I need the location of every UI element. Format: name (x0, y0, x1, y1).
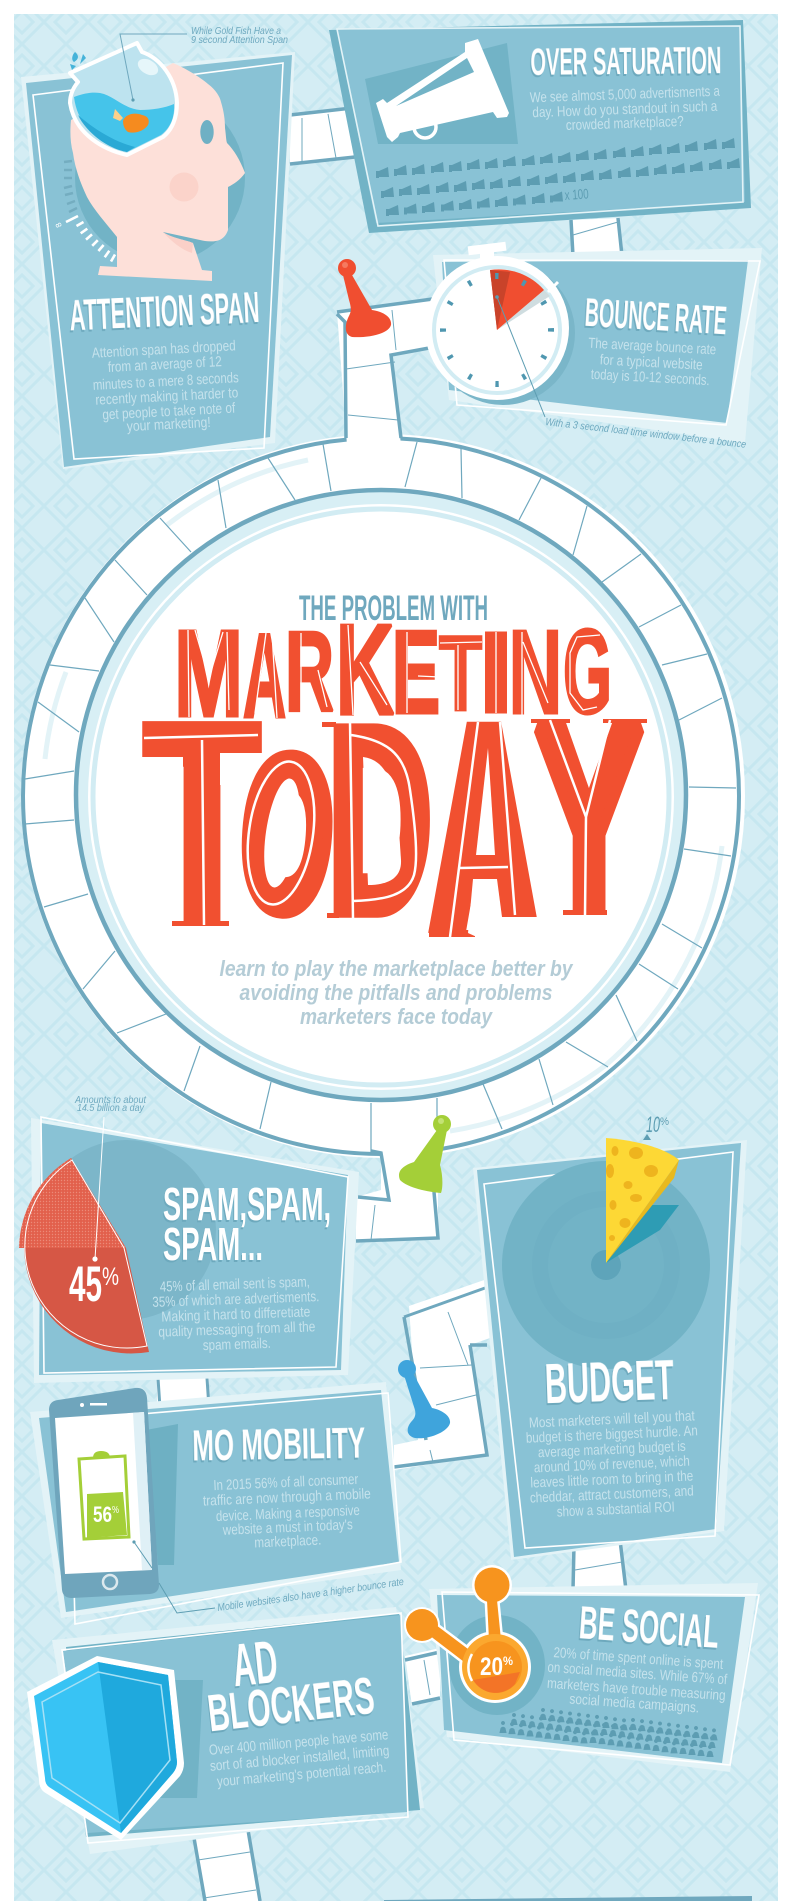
heading: ad blockers: AD (229, 1628, 281, 1699)
board path: between attention span and over saturation (290, 108, 355, 164)
text: budget body: show a substantial ROI (557, 1499, 675, 1521)
tick gauge (54, 161, 115, 262)
text: budget body: around 10% of revenue, which (534, 1454, 690, 1476)
panel: bounce rate (433, 248, 762, 451)
text: budget body (526, 1408, 698, 1521)
heading: marketing: G (563, 605, 612, 739)
text: bounce rate body (588, 336, 717, 389)
icon: megaphone (376, 39, 509, 142)
text: attention span body: recently making it harder to (95, 385, 239, 409)
heading: today: Y (535, 671, 643, 962)
panel: be social (404, 1565, 759, 1772)
label: 20%: % (503, 1654, 513, 1668)
text: ad blockers body: sort of ad blocker installed, limiting (209, 1743, 390, 1775)
label: 10%: % (660, 1116, 669, 1128)
text: be social body: marketers have trouble measuring (546, 1676, 726, 1704)
panel: over saturation (329, 20, 751, 233)
text: spam body: Making it hard to differetiate (161, 1304, 311, 1326)
chart: 45% pie wedge: % (102, 1263, 119, 1291)
text: attention span body (91, 338, 239, 435)
text: mobile body: device. Making a responsive (216, 1503, 360, 1525)
subtitle: marketers face today (300, 1004, 494, 1029)
board path: spam to mobility (157, 1378, 209, 1408)
panel: budget (473, 1112, 747, 1560)
text: budget body: budget is there biggest hurdle. An (526, 1423, 698, 1447)
annotation: 14.5 billion (74, 1094, 147, 1114)
text: be social body: 20% of time spent online is spent (553, 1645, 724, 1673)
icon: phone (49, 1388, 159, 1598)
icon: orange social hub (404, 1565, 531, 1703)
text: bounce rate body: for a typical website (599, 352, 703, 374)
heading: marketing: E (392, 606, 440, 738)
heading: ad blockers (205, 1628, 377, 1743)
annotation: 14.5 billion: 14.5 billion a day (77, 1102, 145, 1114)
text: ad blockers body: your marketing's potential reach. (216, 1760, 387, 1790)
heading: marketing: I (478, 609, 514, 737)
text: mobile body (203, 1472, 371, 1551)
target circles (502, 1161, 710, 1369)
heading: marketing: R (285, 608, 334, 735)
subtitle: learn to play the marketplace better by (220, 956, 574, 981)
text: attention span body: minutes to a mere 8 seconds (92, 370, 239, 394)
text: ad blockers body: Over 400 million people have some (208, 1727, 389, 1759)
heading: the problem with: THE PROBLEM WITH (299, 589, 488, 628)
chart: 45% pie wedge (19, 1117, 149, 1354)
text: bounce rate body: The average bounce rate (588, 336, 717, 358)
board path: blue pawn corridor (394, 1278, 490, 1470)
label: 45%: 45 (69, 1256, 102, 1312)
annotation: mobile bounce (132, 1540, 405, 1614)
panel: spam (19, 1117, 359, 1383)
text: spam body: 35% of which are advertisments. (152, 1289, 320, 1311)
text: ad blockers body (208, 1727, 390, 1790)
text: budget body: Most marketers will tell you that (529, 1408, 695, 1432)
board path: budget to social (573, 1540, 626, 1592)
text: budget body: cheddar, attract customers, and (530, 1483, 694, 1507)
head shadow circle (75, 93, 245, 263)
heading: budget: BUDGET (544, 1348, 675, 1416)
annotation: 14.5 billion: Amounts to about (74, 1094, 147, 1106)
label: 10%: 10 (646, 1112, 660, 1137)
shield shadow (160, 1680, 203, 1798)
heading: ad blockers: BLOCKERS (205, 1667, 377, 1743)
panel: ad blockers (27, 1607, 424, 1854)
text: budget body: leaves little room to bring in the (530, 1468, 694, 1492)
board path: between over saturation and bounce rate (571, 218, 622, 256)
icon: battery: % (112, 1505, 119, 1516)
text: attention span body: Attention span has dropped (91, 338, 236, 362)
icon: stopwatch (425, 242, 575, 417)
text: spam body: quality messaging from all the (158, 1319, 316, 1341)
icon: battery (79, 1451, 129, 1539)
annotation: gold fish: 9 second Attention Span (191, 34, 288, 46)
annotation: gold fish: While Gold Fish Have a (191, 25, 281, 37)
chart: people pictogram (499, 1708, 718, 1757)
text: over saturation body: day. How do you standout in such a (532, 99, 718, 121)
game board ring (21, 434, 745, 1158)
board path: ring exit to green pawn (356, 1145, 442, 1241)
text: attention span body: your marketing! (126, 415, 211, 435)
icon: head (70, 63, 245, 281)
annotation: gold fish (120, 25, 288, 102)
text: over saturation body: We see almost 5,000 advertisments a (530, 84, 721, 106)
icon: fish bowl (70, 43, 177, 155)
backdrop circle (36, 1140, 216, 1320)
text: spam body (152, 1274, 320, 1354)
text: over saturation body: crowded marketplace? (566, 114, 684, 134)
subtitle (220, 956, 574, 1029)
text: spam body: 45% of all email sent is spam, (160, 1274, 310, 1296)
text: mobile body: In 2015 56% of all consumer (213, 1472, 359, 1494)
icon: red pawn (338, 259, 391, 337)
heading: mo mobility: MO MOBILITY (192, 1418, 366, 1471)
text: budget body: average marketing budget is (538, 1439, 686, 1461)
heading: marketing: K (336, 598, 394, 742)
panel: attention span (21, 25, 295, 469)
title block (140, 589, 647, 1029)
heading: today: O (234, 711, 341, 957)
icon: battery: 56 (93, 1502, 112, 1527)
panel: mobile (30, 1382, 405, 1624)
tick gauge: 8 (54, 221, 64, 229)
text: attention span body: get people to take note of (102, 400, 236, 423)
heading: marketing: T (439, 615, 482, 734)
heading: spam: SPAM,SPAM, (163, 1178, 331, 1230)
text: spam body: spam emails. (203, 1336, 271, 1354)
annotation: load time: With a 3 second load time window before a bounce (545, 416, 747, 451)
heading: today: D (328, 676, 432, 966)
heading: marketing: M (174, 606, 243, 743)
board path: ad blockers to social (405, 1648, 440, 1706)
subtitle: avoiding the pitfalls and problems (240, 980, 552, 1005)
heading: marketing (174, 598, 612, 744)
heading: spam: SPAM... (163, 1218, 263, 1270)
heading: today (140, 669, 647, 977)
annotation: mobile bounce: Mobile websites also have a higher bounce rate (217, 1576, 405, 1614)
chart: 5,000 megaphones pictogram: x 100 (564, 185, 589, 203)
hub shadow (449, 1615, 545, 1715)
heading: today: T (145, 669, 259, 977)
heading: spam (163, 1178, 331, 1270)
icon: shield (27, 1656, 184, 1840)
heading: today: A (438, 684, 530, 969)
label: 20%: 20 (480, 1653, 503, 1681)
icon: cheese wedge (606, 1138, 679, 1263)
text: mobile body: marketplace. (254, 1533, 322, 1551)
text: mobile body: website a must in today's (222, 1517, 353, 1539)
text: over saturation body (530, 84, 721, 134)
text: attention span body: from an average of 12 (107, 354, 222, 376)
board path: top to red pawn (337, 298, 440, 445)
text: bounce rate body: today is 10-12 seconds. (590, 367, 710, 389)
text: mobile body: traffic are now through a mobile (203, 1486, 371, 1510)
text: be social body: on social media sites. While 67% of (547, 1660, 728, 1688)
board path: below ad blockers (193, 1830, 260, 1901)
next panel edge at bottom (384, 1896, 752, 1901)
heading: marketing: N (509, 605, 562, 738)
chart: 5,000 megaphones pictogram (376, 138, 740, 216)
icon: green pawn (399, 1115, 451, 1193)
phone shadow (146, 1424, 178, 1565)
heading: marketing: A (243, 609, 286, 744)
heading: attention span: ATTENTION SPAN (68, 283, 260, 340)
text: be social body: social media campaigns. (569, 1691, 700, 1717)
text: be social body (546, 1645, 728, 1717)
megaphone backdrop (365, 43, 518, 144)
icon: blue pawn (398, 1360, 450, 1438)
